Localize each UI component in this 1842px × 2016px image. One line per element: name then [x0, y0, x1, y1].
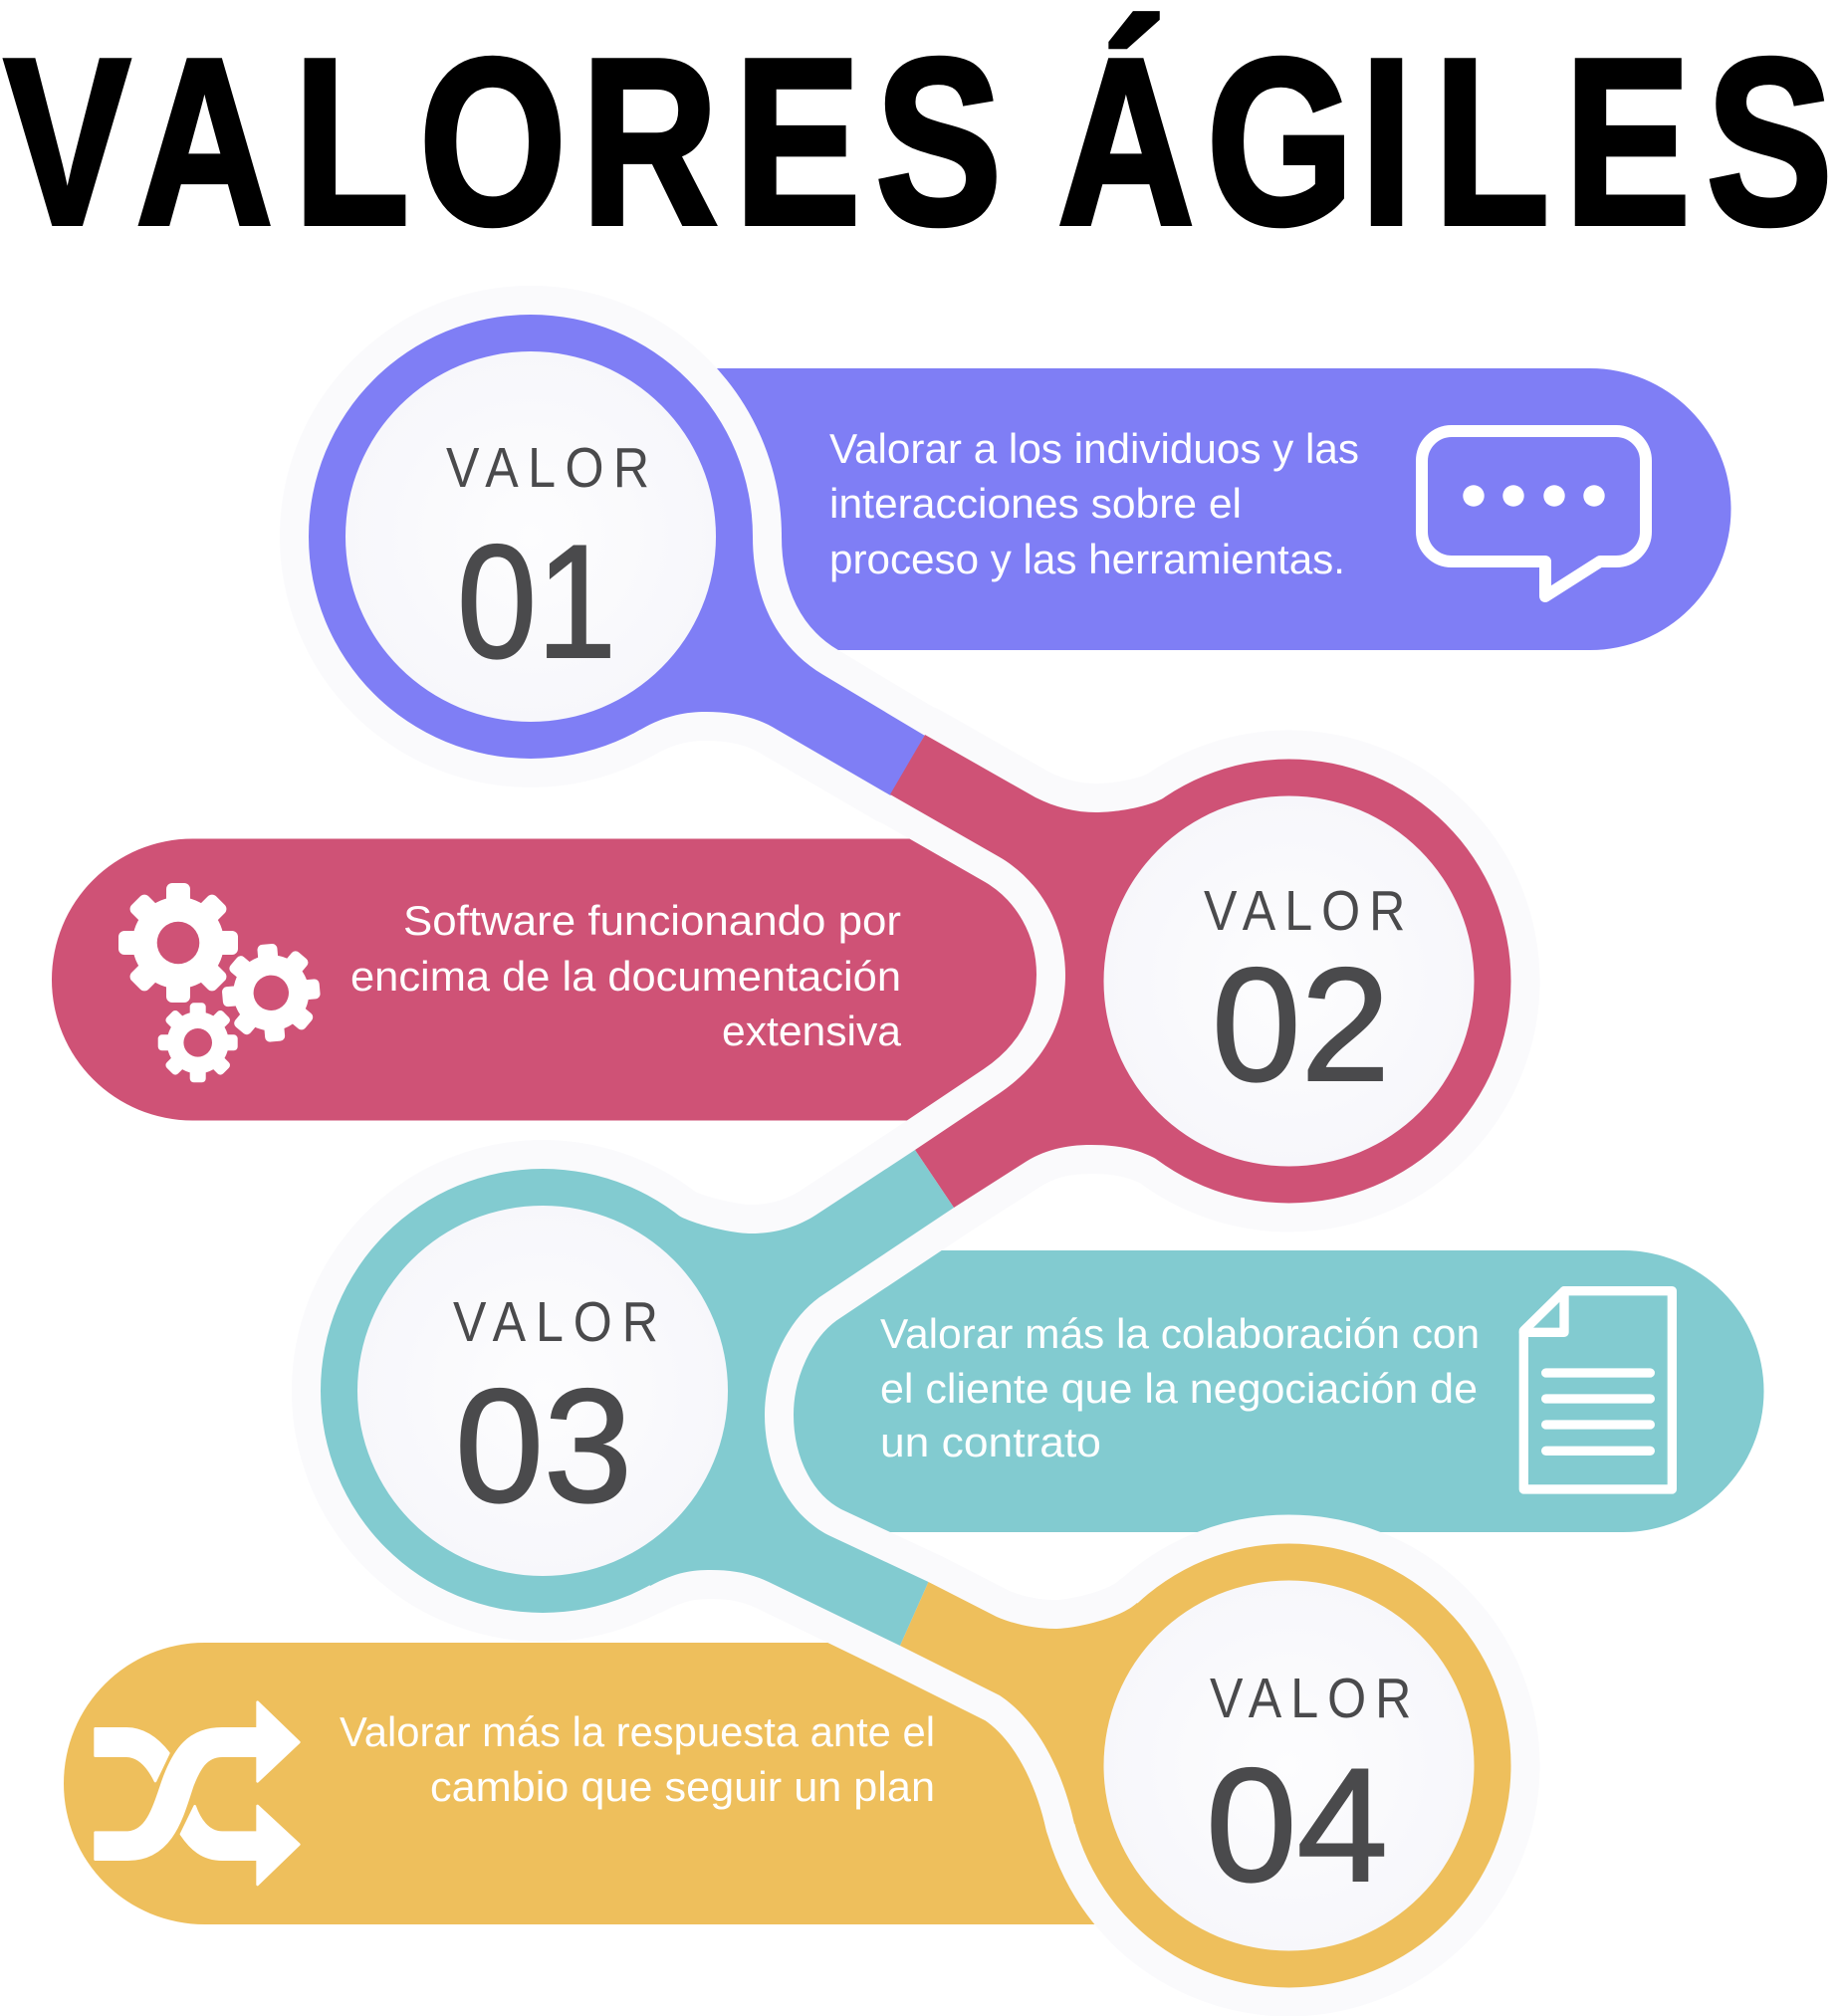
- icon: document: [1523, 1291, 1672, 1489]
- label: valor 03: VALOR: [453, 1290, 658, 1354]
- title: VALORES ÁGILES: [4, 9, 1833, 274]
- ring: valor 04: [900, 1543, 1511, 1987]
- text: valor 01: [829, 425, 1359, 582]
- icon: speech bubble: [1422, 431, 1646, 596]
- text: valor 04: [340, 1708, 935, 1810]
- text: valor 02: extensiva: [722, 1008, 902, 1054]
- text: valor 03: un contrato: [880, 1419, 1101, 1465]
- text: valor 02: [350, 897, 902, 1054]
- number: 03: 03: [455, 1356, 632, 1536]
- icon: gears: [118, 883, 324, 1082]
- panel: valor 02 description: [52, 838, 1067, 1121]
- text: valor 01: proceso y las herramientas.: [829, 536, 1345, 582]
- ring: valor 01: [309, 315, 925, 795]
- panel: valor 01 description: [597, 368, 1731, 650]
- number: 02: 02: [1212, 935, 1390, 1115]
- text: valor 02: encima de la documentación: [350, 953, 901, 1000]
- label: valor 02: VALOR: [1204, 879, 1405, 943]
- text: valor 03: el cliente que la negociación de: [880, 1365, 1478, 1412]
- number: 01: 01: [457, 512, 616, 692]
- text: valor 04: Valorar más la respuesta ante el: [340, 1708, 935, 1755]
- halo: white outline behind the connected rings: [309, 315, 1511, 1987]
- text: valor 04: cambio que seguir un plan: [430, 1763, 935, 1810]
- ring: valor 02: [890, 735, 1511, 1208]
- label: valor 01: VALOR: [446, 436, 649, 500]
- text: valor 01: Valorar a los individuos y las: [829, 425, 1359, 472]
- text: valor 01: interacciones sobre el: [829, 480, 1242, 527]
- text: valor 03: [880, 1310, 1480, 1465]
- number: 04: 04: [1206, 1735, 1388, 1915]
- ring: valor 03: [321, 1150, 954, 1646]
- icon: shuffle arrows: [96, 1702, 299, 1885]
- panel: valor 04 description: [64, 1643, 1199, 1924]
- text: valor 03: Valorar más la colaboración con: [880, 1310, 1480, 1357]
- panel: valor 03 description: [777, 1250, 1764, 1532]
- text: valor 02: Software funcionando por: [403, 897, 901, 944]
- label: valor 04: VALOR: [1210, 1667, 1411, 1730]
